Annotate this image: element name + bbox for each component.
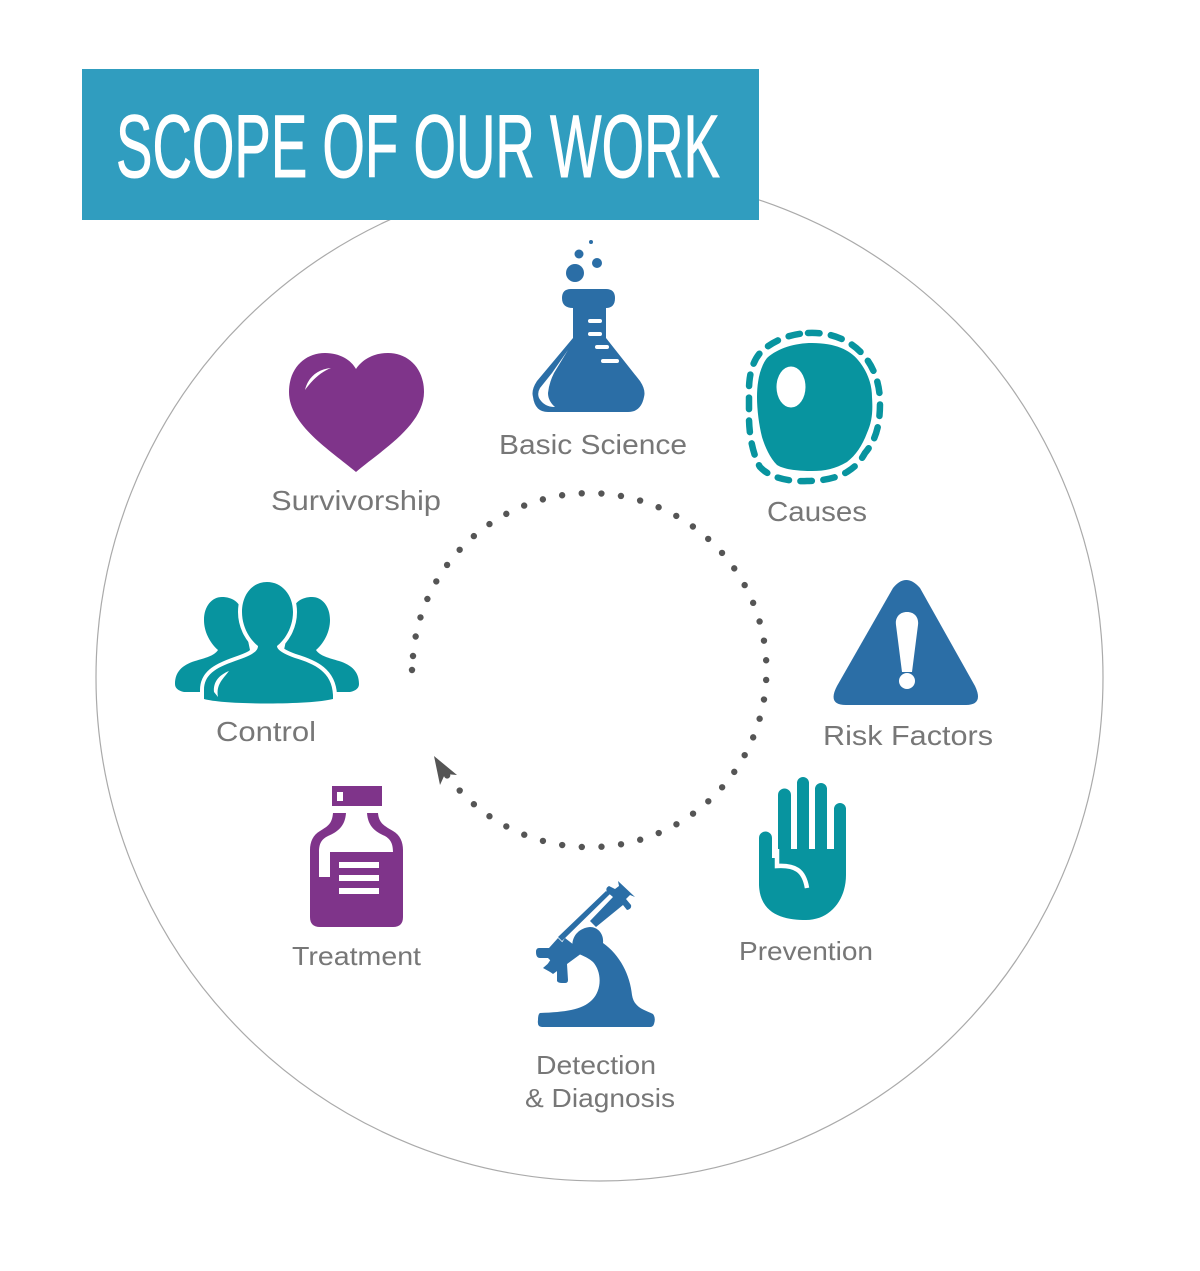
- label: Causes: Causes: [767, 496, 867, 527]
- icon: heart: [289, 353, 424, 472]
- dotted cycle arrow: [409, 493, 766, 847]
- title banner: [82, 69, 759, 220]
- icon: flask: [532, 240, 644, 412]
- icon: bottle: [310, 786, 403, 927]
- label: Risk Factors: Risk Factors: [823, 720, 993, 751]
- icon: people: [175, 582, 359, 704]
- outer circle: [96, 174, 1103, 1181]
- label: Control: Control: [216, 716, 316, 747]
- label: Survivorship: Survivorship: [271, 485, 441, 516]
- label: Prevention: Prevention: [739, 936, 873, 966]
- icon: hand: [759, 777, 846, 920]
- title banner: SCOPE OF OUR WORK: [116, 96, 720, 196]
- label: Detection & Diagnosis: [525, 1050, 675, 1113]
- icon: cell: [749, 333, 880, 481]
- icon: microscope: [536, 881, 655, 1027]
- label: Detection & Diagnosis: Detection: [536, 1050, 656, 1080]
- icon: warning triangle: [834, 580, 978, 705]
- label: Treatment: Treatment: [292, 941, 422, 971]
- label: Detection & Diagnosis: & Diagnosis: [525, 1083, 675, 1113]
- label: Basic Science: Basic Science: [499, 429, 687, 460]
